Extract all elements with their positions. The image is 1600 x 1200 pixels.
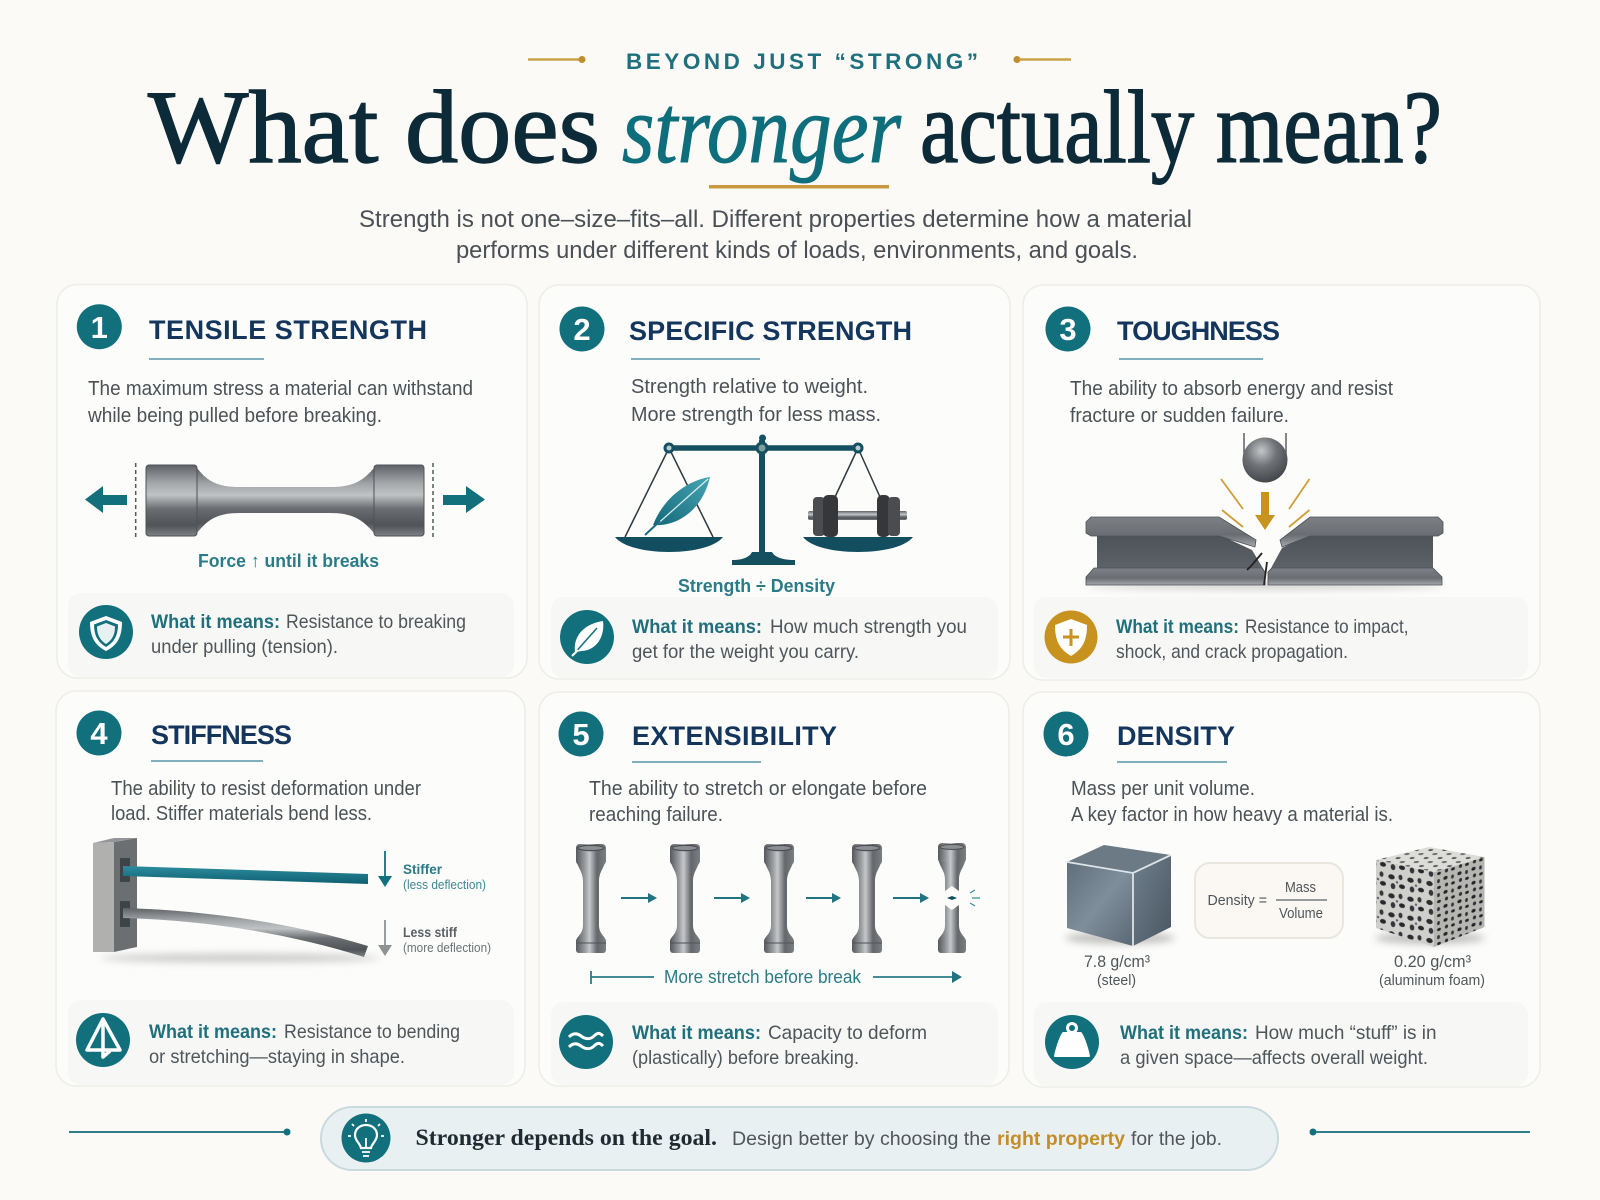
number badge 5: 5	[572, 717, 590, 752]
description	[1071, 778, 1393, 826]
subtitle	[359, 206, 1192, 264]
formula card: Volume	[1279, 906, 1323, 922]
icon: light bulb	[342, 1114, 390, 1162]
meaning text: Capacity to deform	[768, 1022, 927, 1044]
icon: gold shield	[1044, 610, 1098, 664]
meaning text: What it means:	[149, 1021, 277, 1043]
caption with dimension arrow: more stretch before break: More stretch before break	[664, 966, 862, 987]
meaning text: What it means:	[632, 616, 762, 638]
caption with dimension arrow: more stretch before break	[591, 966, 962, 987]
meaning text: under pulling (tension).	[151, 636, 338, 658]
meaning text	[1120, 1022, 1436, 1069]
label: steel density: (steel)	[1097, 972, 1136, 989]
description: Mass per unit volume.	[1071, 778, 1255, 800]
callout text	[416, 1125, 1222, 1151]
number badge 1: 1	[91, 310, 108, 345]
formula card: Mass	[1285, 880, 1316, 896]
meaning text: What it means:	[632, 1022, 761, 1044]
label: foam density	[1379, 953, 1485, 989]
number badge 2: 2	[573, 312, 591, 347]
label: foam density: 0.20 g/cm³	[1394, 953, 1471, 971]
footer callout	[321, 1107, 1278, 1170]
label: steel density: 7.8 g/cm³	[1084, 953, 1150, 971]
callout text: Design better by choosing the	[732, 1128, 991, 1150]
heading: specific strength: SPECIFIC STRENGTH	[629, 316, 912, 346]
caption: strength divided by density: Strength ÷ Density	[678, 575, 836, 596]
number badge 3: 3	[1059, 312, 1077, 347]
formula card: Density =	[1208, 892, 1267, 909]
description: The ability to stretch or elongate before	[589, 778, 927, 800]
meaning text: a given space—affects overall weight.	[1120, 1047, 1428, 1069]
meaning text	[1116, 616, 1408, 663]
arrow: less stiff	[378, 920, 392, 956]
formula card	[1195, 863, 1343, 938]
illustration: steel cube	[1065, 845, 1175, 946]
illustration: tensile specimen	[136, 463, 433, 537]
description	[589, 778, 927, 826]
number badge 4	[76, 710, 122, 756]
icon: stiff truss	[76, 1013, 130, 1067]
title: stronger	[622, 76, 902, 184]
meaning text: (plastically) before breaking.	[632, 1047, 859, 1069]
icon: shield	[79, 605, 133, 659]
feather	[645, 477, 710, 535]
what it means box	[551, 1002, 998, 1085]
description: A key factor in how heavy a material is.	[1071, 804, 1393, 826]
footer rule right	[1310, 1128, 1530, 1136]
description: fracture or sudden failure.	[1070, 405, 1289, 427]
what it means box	[68, 593, 514, 677]
number badge 6: 6	[1057, 717, 1075, 752]
description: load. Stiffer materials bend less.	[111, 803, 372, 825]
number badge 1	[77, 304, 122, 349]
number badge 5	[558, 712, 604, 756]
icon: leaf	[560, 610, 614, 664]
title underline	[709, 185, 889, 188]
panel: stiffness	[56, 691, 525, 1086]
heading: extensibility: EXTENSIBILITY	[632, 721, 837, 751]
arrow: pull right	[443, 486, 485, 513]
description	[1070, 378, 1393, 427]
icon: waves	[559, 1015, 613, 1069]
description: reaching failure.	[589, 804, 723, 826]
description	[87, 378, 473, 427]
description	[111, 778, 421, 825]
description: The ability to absorb energy and resist	[1070, 378, 1393, 400]
description: The maximum stress a material can withstand	[88, 378, 473, 400]
illustration: balance scale with feather and dumbbell	[615, 434, 913, 565]
panel: density	[1023, 692, 1540, 1087]
panel: specific strength	[539, 285, 1010, 679]
label: stiffer	[403, 861, 486, 892]
what it means box	[68, 1000, 514, 1085]
what it means box	[551, 597, 998, 678]
meaning text: How much “stuff” is in	[1255, 1022, 1436, 1044]
meaning text	[632, 616, 967, 663]
title: What does	[148, 70, 600, 185]
meaning text: shock, and crack propagation.	[1116, 641, 1348, 663]
caption: force until it breaks: Force ↑ until it breaks	[198, 550, 379, 571]
title: actually mean?	[920, 70, 1442, 185]
description	[631, 376, 881, 426]
arrows between specimens	[621, 893, 929, 903]
description: More strength for less mass.	[631, 404, 881, 426]
subtitle: performs under different kinds of loads, environments, and goals.	[456, 237, 1138, 264]
meaning text: Resistance to impact,	[1245, 616, 1408, 638]
dumbbell	[808, 495, 907, 537]
number badge 6	[1044, 712, 1088, 756]
meaning text: Resistance to breaking	[286, 611, 466, 633]
callout text: right property	[997, 1128, 1125, 1150]
illustration: specimen stretching sequence	[576, 843, 980, 953]
label: foam density: (aluminum foam)	[1379, 972, 1485, 989]
callout text: Stronger depends on the goal.	[416, 1125, 717, 1151]
title	[148, 70, 1442, 185]
meaning text	[632, 1022, 927, 1069]
heading: tensile strength: TENSILE STRENGTH	[149, 315, 427, 345]
eyebrow: beyond just strong: BEYOND JUST “STRONG”	[626, 49, 978, 74]
number badge 3	[1046, 306, 1090, 352]
label: less stiff: Less stiff	[403, 924, 457, 940]
arrow: pull left	[85, 486, 127, 513]
meaning text: What it means:	[1120, 1022, 1248, 1044]
meaning text: What it means:	[1116, 616, 1239, 638]
label: less stiff: (more deflection)	[403, 941, 491, 955]
heading: toughness: TOUGHNESS	[1117, 316, 1280, 346]
broken specimen	[938, 843, 980, 953]
meaning text: What it means:	[151, 611, 280, 633]
label: less stiff	[403, 924, 491, 955]
meaning text	[149, 1021, 460, 1068]
number badge 2	[560, 306, 604, 352]
label: steel density	[1084, 953, 1150, 989]
description: The ability to resist deformation under	[111, 778, 421, 800]
illustration: impact ball on cracked beam	[1086, 433, 1443, 589]
meaning text: Resistance to bending	[284, 1021, 460, 1043]
label: stiffer: Stiffer	[403, 861, 443, 877]
meaning text	[151, 611, 466, 658]
icon: kettle weight	[1045, 1015, 1099, 1069]
eyebrow: beyond just strong	[528, 49, 1071, 74]
number badge 4: 4	[90, 716, 108, 751]
what it means box	[1034, 1002, 1528, 1086]
label: stiffer: (less deflection)	[403, 878, 486, 892]
arrow: stiffer	[378, 851, 392, 887]
description: Strength relative to weight.	[631, 376, 868, 398]
panel: toughness	[1023, 285, 1540, 680]
description: while being pulled before breaking.	[87, 405, 382, 427]
meaning text: get for the weight you carry.	[632, 641, 859, 663]
meaning text: How much strength you	[770, 616, 967, 638]
panel: tensile strength	[57, 284, 527, 678]
heading: stiffness: STIFFNESS	[151, 720, 292, 750]
what it means box	[1034, 597, 1528, 678]
meaning text: or stretching—staying in shape.	[149, 1046, 405, 1068]
callout text: for the job.	[1131, 1128, 1222, 1150]
illustration: cantilever beams	[93, 838, 380, 962]
illustration: aluminum foam cube	[1375, 847, 1485, 947]
panel: extensibility	[539, 692, 1009, 1086]
subtitle: Strength is not one–size–fits–all. Different properties determine how a material	[359, 206, 1192, 233]
footer rule left	[69, 1128, 290, 1136]
heading: density: DENSITY	[1117, 721, 1235, 751]
